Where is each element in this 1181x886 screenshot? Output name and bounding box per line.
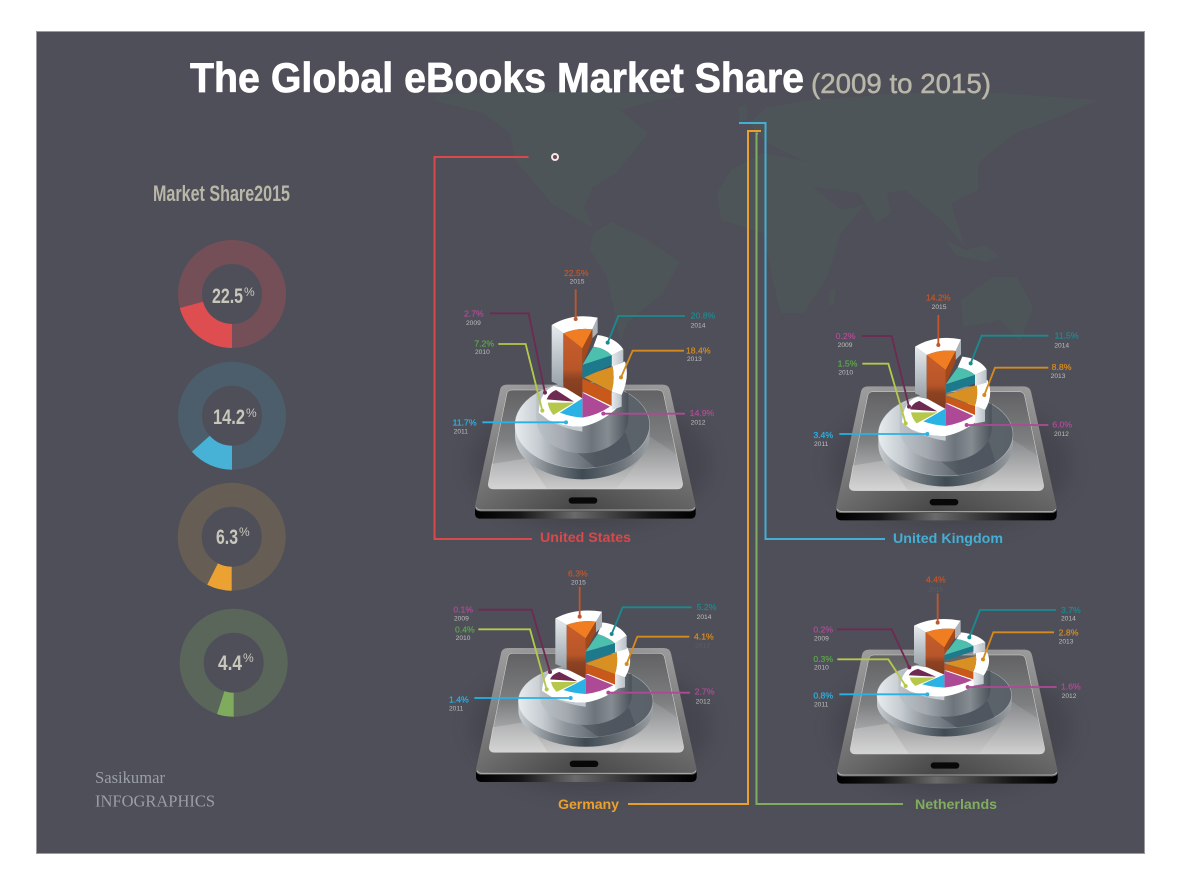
chart: United States [453, 268, 716, 530]
data labels: 2.7% [695, 687, 715, 697]
credit text: INFOGRAPHICS [95, 792, 215, 810]
connector: United States [434, 157, 532, 539]
data labels: 2012 [1054, 431, 1069, 438]
data labels: 2012 [696, 699, 711, 706]
data labels: 3.7% [1061, 605, 1081, 615]
data labels [453, 268, 716, 435]
data labels: 22.5% [564, 268, 589, 278]
data labels: 14.9% [690, 408, 715, 418]
leader lines [474, 587, 692, 700]
data labels: 2015 [928, 586, 943, 593]
donut: United States 22.5%: % [244, 285, 255, 299]
leader lines [837, 593, 1057, 696]
heading: market share 2015: Market Share2015 [153, 181, 290, 206]
pie chart [878, 338, 1013, 487]
data labels: 0.4% [455, 624, 475, 634]
label: Germany: Germany [558, 797, 619, 813]
data labels: 0.2% [836, 331, 856, 341]
data labels: 1.6% [1061, 681, 1081, 691]
data labels: 4.4% [926, 575, 946, 585]
donut: United Kingdom 14.2%: % [246, 406, 257, 420]
tablet [470, 385, 710, 530]
data labels: 14.2% [926, 293, 951, 303]
map marker: United States [552, 154, 558, 160]
data labels: 2010 [475, 349, 490, 356]
donut: Germany 6.3%: % [239, 525, 250, 539]
tablet [832, 650, 1072, 795]
data labels: 2009 [838, 342, 853, 349]
data labels: 2009 [814, 635, 829, 642]
connector: Netherlands [756, 134, 903, 804]
pie chart [518, 610, 653, 747]
data labels: 2011 [814, 441, 829, 448]
data labels: 2015 [570, 278, 585, 285]
data labels: 2009 [454, 615, 469, 622]
donut: Netherlands 4.4%: % [243, 651, 254, 665]
chart: Germany [449, 568, 717, 793]
data labels: 2010 [456, 635, 471, 642]
data labels: 0.2% [813, 625, 833, 635]
data labels: 1.4% [449, 695, 469, 705]
data labels: 0.1% [453, 605, 473, 615]
data labels: 11.7% [453, 417, 477, 427]
data labels: 2012 [691, 419, 706, 426]
data labels: 2.7% [464, 309, 484, 319]
pie chart [515, 316, 650, 479]
leader lines [482, 289, 685, 424]
donut: Germany 6.3% [190, 495, 274, 591]
label: Netherlands: Netherlands [915, 797, 997, 813]
data labels: 2010 [838, 369, 853, 376]
data labels: 2012 [1062, 693, 1077, 700]
data labels: 18.4% [686, 345, 711, 355]
data labels: 2013 [1051, 373, 1066, 380]
data labels: 2010 [814, 665, 829, 672]
data labels: 4.1% [694, 631, 714, 641]
data labels: 3.4% [813, 430, 833, 440]
donut: Netherlands 4.4% [192, 621, 276, 717]
data labels: 2009 [466, 320, 481, 327]
data labels: 2013 [687, 356, 702, 363]
donut: United Kingdom 14.2%: 14.2 [213, 406, 245, 429]
data labels: 2014 [1061, 616, 1076, 623]
data labels: 2015 [571, 579, 586, 586]
label: United Kingdom: United Kingdom [893, 531, 1003, 547]
data labels: 1.5% [838, 359, 858, 369]
donut: United States 22.5%: 22.5 [212, 285, 243, 308]
leader lines [839, 315, 1048, 436]
data labels: 2015 [932, 304, 947, 311]
donut: Netherlands 4.4%: 4.4 [218, 652, 242, 675]
title: The Global eBooks Market Share [190, 54, 804, 101]
credit text [95, 768, 215, 810]
data labels: 8.8% [1052, 362, 1072, 372]
data labels: 2014 [691, 322, 706, 329]
data labels: 2013 [1059, 639, 1074, 646]
data labels: 2014 [697, 614, 712, 621]
pie chart [877, 619, 1012, 737]
title: (2009 to 2015) [811, 68, 991, 99]
data labels: 6.3% [568, 568, 588, 578]
chart: Netherlands [813, 575, 1081, 795]
data labels: 0.3% [813, 654, 833, 664]
tablet [831, 386, 1071, 532]
data labels [449, 568, 717, 713]
data labels: 11.5% [1055, 330, 1079, 340]
data labels: 7.2% [474, 338, 494, 348]
label: United States: United States [540, 530, 631, 546]
data labels: 2011 [449, 706, 464, 713]
data labels [813, 293, 1079, 448]
credit text: Sasikumar [95, 768, 165, 787]
data labels: 2.8% [1059, 627, 1079, 637]
data labels: 2011 [454, 428, 468, 435]
data labels: 2013 [695, 642, 710, 649]
donut: United Kingdom 14.2% [190, 374, 274, 470]
connector: United Kingdom [739, 123, 885, 539]
data labels: 6.0% [1052, 419, 1072, 429]
world map [432, 92, 1098, 342]
data labels: 0.8% [813, 691, 833, 701]
tablet [471, 648, 711, 793]
data labels: 2014 [1054, 343, 1069, 350]
connector: Germany [628, 131, 761, 804]
data labels: 2011 [814, 701, 829, 708]
chart: United Kingdom [813, 293, 1079, 532]
donut: United States 22.5% [180, 252, 274, 348]
data labels: 20.8% [691, 311, 716, 321]
donut: Germany 6.3%: 6.3 [216, 526, 238, 549]
data labels: 5.2% [697, 602, 717, 612]
data labels [813, 575, 1081, 708]
